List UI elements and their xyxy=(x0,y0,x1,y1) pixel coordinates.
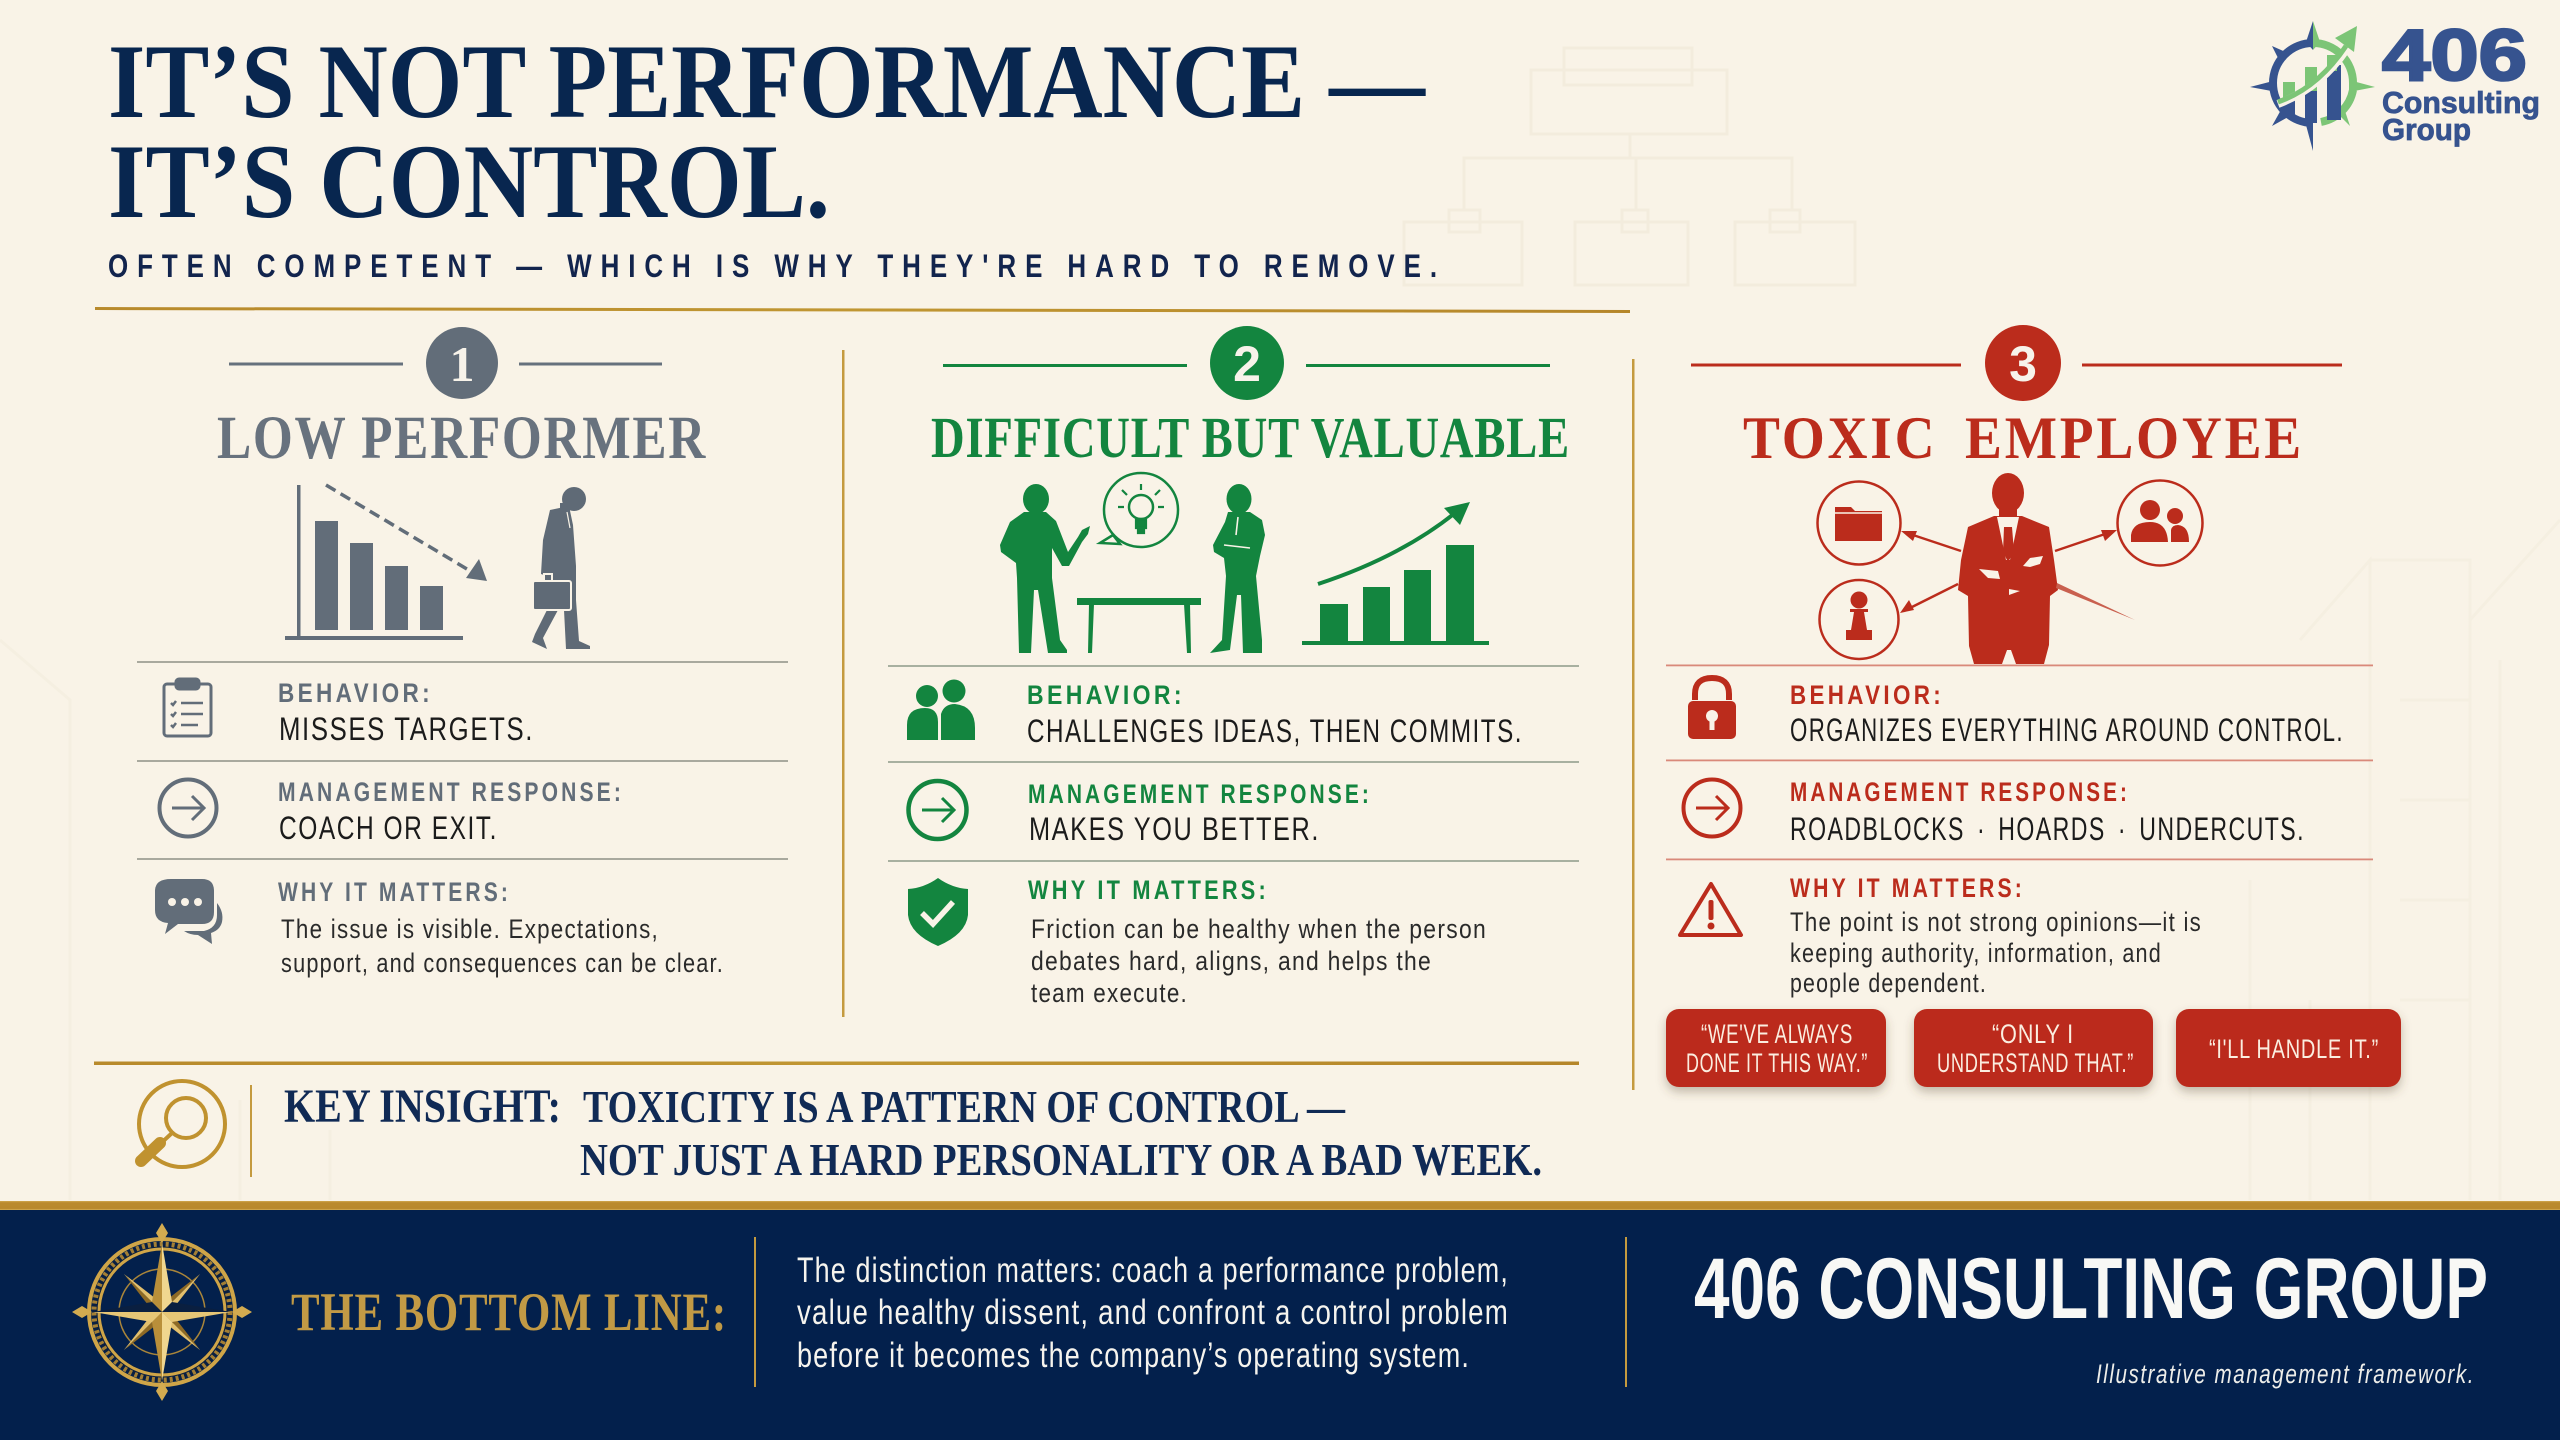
panel: low performer xyxy=(137,327,788,978)
row: behavior: BEHAVIOR: xyxy=(1790,680,1944,710)
number badge 1: 1 xyxy=(450,336,474,392)
row: management response: MANAGEMENT RESPONSE: xyxy=(1028,779,1372,809)
row: management response xyxy=(1028,779,1372,847)
panel: toxic employee xyxy=(1666,325,2401,1087)
row dividers xyxy=(1666,664,2373,860)
row dividers xyxy=(888,665,1579,862)
key insight text xyxy=(284,1080,1542,1185)
number badge 3: 3 xyxy=(2009,336,2037,392)
number badge 1 xyxy=(229,327,662,399)
row: management response: COACH OR EXIT. xyxy=(279,810,498,846)
row: management response xyxy=(1790,777,2305,847)
footer divider right xyxy=(1625,1237,1627,1387)
icon: arrow circle xyxy=(908,781,966,839)
row: management response xyxy=(278,777,624,846)
row: why it matters xyxy=(278,877,724,978)
panel: difficult but valuable xyxy=(888,326,1579,1008)
row: behavior: MISSES TARGETS. xyxy=(279,711,534,747)
callout: quote 1: DONE IT THIS WAY.” xyxy=(1686,1048,1868,1078)
row: behavior xyxy=(1790,680,2344,748)
icon: shield with check xyxy=(908,878,968,946)
row: management response: MANAGEMENT RESPONSE: xyxy=(1790,777,2130,807)
logo mark xyxy=(2250,21,2375,151)
divider xyxy=(250,1085,252,1177)
row: why it matters: keeping authority, information, and xyxy=(1790,938,2162,968)
callout: quote 1 xyxy=(1666,1009,1886,1087)
icon: chat bubbles xyxy=(155,879,222,944)
title xyxy=(108,23,1426,240)
key insight text: NOT JUST A HARD PERSONALITY OR A BAD WEEK. xyxy=(580,1134,1542,1185)
icon: clipboard xyxy=(164,679,211,736)
row dividers xyxy=(137,661,788,860)
callout: quote 2 xyxy=(1914,1009,2153,1087)
row: why it matters: The point is not strong opinions—it is xyxy=(1790,907,2202,937)
key insight text: TOXICITY IS A PATTERN OF CONTROL — xyxy=(583,1081,1346,1132)
footer divider left xyxy=(754,1237,756,1387)
icon: compass rose xyxy=(72,1223,252,1401)
number badge 2 xyxy=(943,326,1550,400)
row: management response: ROADBLOCKS · HOARDS · UNDERCUTS. xyxy=(1790,811,2305,847)
number badge 2: 2 xyxy=(1233,336,1261,392)
icon: walking man with briefcase xyxy=(532,487,590,649)
row: behavior: CHALLENGES IDEAS, THEN COMMITS. xyxy=(1027,713,1523,749)
title: IT’S CONTROL. xyxy=(108,123,830,240)
heading: difficult but valuable: DIFFICULT BUT VALUABLE xyxy=(931,405,1570,470)
row: why it matters: WHY IT MATTERS: xyxy=(1028,875,1269,905)
row: why it matters: team execute. xyxy=(1031,978,1188,1008)
number badge 3 xyxy=(1691,325,2342,401)
key insight text: KEY INSIGHT: xyxy=(284,1080,561,1133)
bottom line text: The distinction matters: coach a performance problem, xyxy=(797,1251,1509,1290)
callout: quote 3 xyxy=(2176,1009,2401,1087)
icon: magnifier xyxy=(139,1081,225,1167)
logo: 406 consulting group xyxy=(2250,16,2540,151)
bottom line text: value healthy dissent, and confront a control problem xyxy=(797,1293,1509,1332)
icon: declining bar chart xyxy=(285,485,487,640)
column divider 2 xyxy=(1632,359,1634,1090)
callout: quote 2: UNDERSTAND THAT.” xyxy=(1937,1048,2134,1078)
row: behavior xyxy=(1027,680,1523,749)
row: why it matters xyxy=(1790,873,2202,998)
heading: the bottom line: THE BOTTOM LINE: xyxy=(291,1282,727,1342)
column divider 1 xyxy=(842,350,844,1017)
icon: warning triangle xyxy=(1680,884,1741,935)
callout: quote 1: “WE'VE ALWAYS xyxy=(1701,1019,1853,1049)
icon: padlock xyxy=(1688,678,1736,739)
row: why it matters: support, and consequences can be clear. xyxy=(281,948,724,978)
icon: arrow circle xyxy=(160,780,216,836)
row: why it matters: WHY IT MATTERS: xyxy=(1790,873,2025,903)
row: behavior xyxy=(278,678,534,747)
row: why it matters: debates hard, aligns, and helps the xyxy=(1031,946,1432,976)
bottom line text xyxy=(797,1251,1509,1375)
key insight rule xyxy=(94,1062,1579,1065)
panel: key insight xyxy=(139,1080,1542,1185)
bottom line text: before it becomes the company’s operating system. xyxy=(797,1336,1470,1375)
icon: rising bar chart xyxy=(1302,502,1489,645)
heading: low performer: LOW PERFORMER xyxy=(217,405,707,472)
background: faint org chart xyxy=(0,48,2560,1200)
row: why it matters: WHY IT MATTERS: xyxy=(278,877,511,907)
icon: two people with idea at a table xyxy=(1000,473,1265,653)
icon: two people xyxy=(907,680,975,740)
row: behavior: BEHAVIOR: xyxy=(1027,680,1185,710)
icon: toxic figure with arrows to controlled resources xyxy=(1818,473,2202,664)
icon: arrow circle xyxy=(1684,780,1740,836)
callout: quote 3: “I'LL HANDLE IT.” xyxy=(2209,1034,2379,1064)
callout: quote 2: “ONLY I xyxy=(1992,1019,2074,1049)
title rule xyxy=(95,307,1630,313)
logo wordmark: Group xyxy=(2382,112,2471,147)
row: why it matters: The issue is visible. Expectations, xyxy=(281,914,659,944)
title: IT’S NOT PERFORMANCE — xyxy=(108,23,1426,140)
logo wordmark: 406 xyxy=(2382,16,2527,96)
row: why it matters: people dependent. xyxy=(1790,968,1987,998)
heading: toxic employee: TOXIC EMPLOYEE xyxy=(1743,405,2304,471)
row: why it matters: Friction can be healthy when the person xyxy=(1031,914,1487,944)
row: behavior: BEHAVIOR: xyxy=(278,678,433,708)
logo wordmark: Consulting xyxy=(2382,85,2540,120)
subtitle: OFTEN COMPETENT — WHICH IS WHY THEY'RE HARD TO REMOVE. xyxy=(108,248,1446,284)
row: management response: MANAGEMENT RESPONSE: xyxy=(278,777,624,807)
row: why it matters xyxy=(1028,875,1487,1008)
logo wordmark xyxy=(2382,16,2540,147)
footer band xyxy=(0,1201,2560,1440)
row: management response: MAKES YOU BETTER. xyxy=(1029,811,1320,847)
